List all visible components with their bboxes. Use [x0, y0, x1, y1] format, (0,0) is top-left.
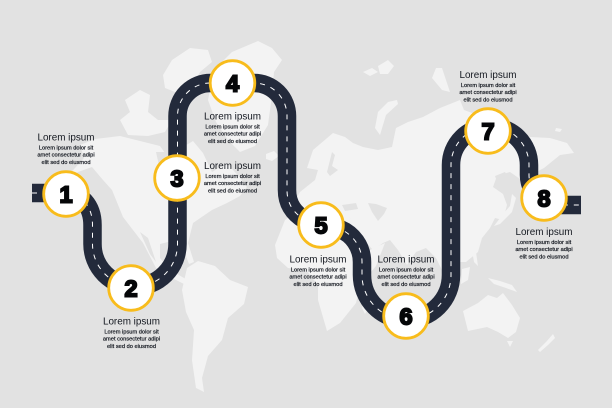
caption 8: Lorem ipsum [515, 227, 573, 238]
map: Borneo [461, 267, 470, 284]
stop 8: 8 [537, 186, 551, 212]
caption 4: elit sed do eiusmod [208, 139, 257, 145]
map: New Guinea [488, 278, 517, 292]
stop 3: 3 [170, 166, 184, 192]
map: Australia [463, 293, 520, 338]
caption 1: Lorem ipsum [37, 132, 95, 144]
caption 8: elit sed do eiusmod [519, 254, 569, 260]
stop 5 [299, 203, 343, 247]
map: Severnaya Zemlya [432, 68, 450, 92]
world map [62, 41, 574, 392]
caption 2 [103, 316, 160, 350]
map: North America [62, 136, 247, 285]
stop 5: 5 [314, 212, 328, 238]
map: east Siberian island [555, 128, 562, 132]
caption 7: elit sed do eiusmod [463, 98, 513, 104]
stop 6: 6 [399, 304, 413, 330]
caption 2: amet consectetur adipi [103, 336, 160, 342]
caption 3 [204, 161, 261, 194]
road [32, 83, 581, 320]
caption 8: amet consectetur adipi [515, 247, 573, 253]
caption 5: Lorem ipsum [289, 254, 347, 266]
caption 6: elit sed do eiusmod [381, 282, 431, 288]
stop 8 [522, 176, 566, 220]
caption 6: Lorem ipsum [377, 254, 435, 266]
caption 2: Lorem ipsum [103, 316, 160, 328]
caption 2: elit sed do eiusmod [107, 344, 156, 350]
caption 5: amet consectetur adipi [289, 274, 347, 280]
map: Africa [275, 205, 385, 331]
map: Tasmania [507, 341, 513, 347]
map: Arctic archipelago [120, 90, 172, 136]
caption 6: Lorem ipsum dolor sit [379, 268, 434, 274]
map: South America [182, 261, 248, 392]
caption 8: Lorem ipsum dolor sit [517, 240, 572, 246]
caption 5 [289, 254, 347, 288]
caption 7 [459, 70, 517, 104]
stop 4 [210, 61, 255, 105]
caption 2: Lorem ipsum dolor sit [104, 330, 159, 336]
caption 1: Lorem ipsum dolor sit [39, 146, 94, 152]
road centre dashes [32, 83, 581, 320]
caption 5: elit sed do eiusmod [293, 282, 343, 288]
stop 6 [384, 294, 428, 338]
caption 4 [204, 112, 261, 145]
map: Svalbard and Franz Josef [363, 60, 394, 76]
map: New Zealand [538, 334, 555, 352]
caption 4: Lorem ipsum [204, 112, 261, 122]
caption 3: Lorem ipsum dolor sit [205, 174, 260, 180]
caption 7: Lorem ipsum dolor sit [461, 83, 516, 89]
stop 7: 7 [481, 118, 495, 144]
stop 2: 2 [124, 276, 138, 302]
map: inland seas [140, 152, 510, 262]
stop 1: 1 [59, 182, 73, 208]
caption 7: amet consectetur adipi [459, 90, 517, 96]
caption 1: elit sed do eiusmod [41, 160, 91, 166]
stop 1 [44, 172, 88, 216]
caption 7: Lorem ipsum [459, 70, 517, 81]
map: Philippines [472, 250, 478, 266]
stop 4: 4 [226, 70, 239, 96]
stop 3 [155, 156, 199, 200]
map: Novaya Zemlya [375, 100, 398, 135]
map: Japan [494, 194, 516, 226]
caption 1: amet consectetur adipi [37, 152, 95, 158]
caption 6: amet consectetur adipi [377, 274, 435, 280]
map: Greenland [208, 41, 282, 152]
map: Madagascar [362, 290, 372, 314]
caption 8 [515, 227, 573, 260]
caption 3: Lorem ipsum [204, 161, 261, 172]
caption 4: amet consectetur adipi [204, 132, 261, 138]
caption 5: Lorem ipsum dolor sit [291, 268, 346, 274]
map: Ellesmere islands [163, 48, 212, 92]
map: Iceland [266, 151, 279, 161]
caption 3: amet consectetur adipi [204, 181, 261, 187]
caption 6 [377, 254, 435, 288]
caption 1 [37, 132, 95, 166]
caption 3: elit sed do eiusmod [208, 188, 257, 194]
caption 4: Lorem ipsum dolor sit [205, 124, 260, 130]
stop 2 [109, 266, 153, 310]
map: Eurasia [293, 100, 574, 272]
stop 7 [466, 109, 510, 153]
road surface [32, 83, 581, 320]
